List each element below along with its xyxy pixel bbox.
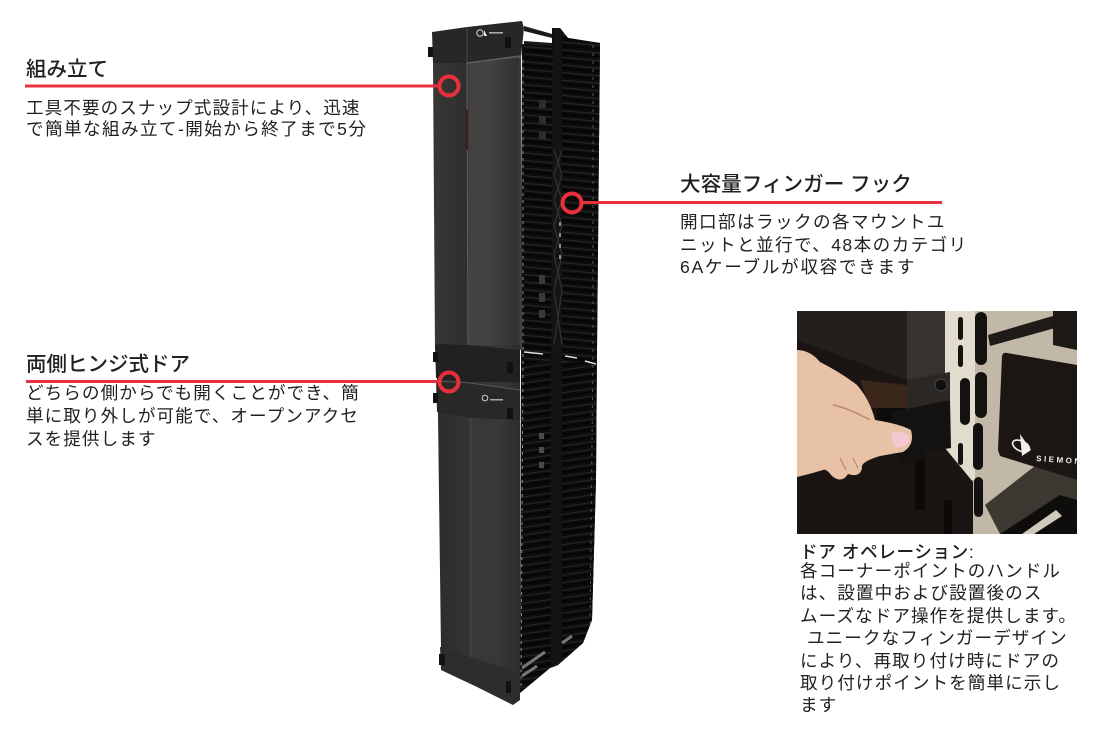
body: finger hook: [680, 212, 968, 277]
body: door operation: 各コーナーポイントのハンドル: [800, 561, 1061, 581]
text block: door operation: [800, 542, 1077, 715]
heading: hinged door: 両側ヒンジ式ドア: [26, 353, 190, 376]
body: hinged door: [26, 383, 360, 449]
bottom cap: [439, 647, 520, 705]
body: door operation: ます: [800, 695, 837, 715]
text block: finger hook: [680, 173, 968, 277]
body: finger hook: 開口部はラックの各マウントユ: [680, 212, 946, 232]
body: door operation: は、設置中および設置後のス: [800, 583, 1042, 603]
body: door operation: ユニークなフィンガーデザイン: [807, 628, 1068, 648]
heading: finger hook: 大容量フィンガー フック: [680, 173, 912, 196]
callout line: finger hook: [562, 194, 942, 212]
body: hinged door: スを提供します: [26, 429, 157, 449]
text block: hinged door: [26, 353, 360, 449]
Siemon card: SIEMON: [1036, 454, 1083, 466]
tower upper door: [428, 21, 524, 350]
tower rear handle: [524, 26, 552, 47]
body: finger hook: 6Aケーブルが収容できます: [680, 257, 916, 277]
heading: assembly: 組み立て: [26, 58, 108, 81]
body: assembly: で簡単な組み立て-開始から終了まで5分: [26, 119, 367, 139]
mid caps with logo: [433, 344, 520, 420]
hand: [797, 350, 912, 480]
body: finger hook: ニットと並行で、48本のカテゴリ: [680, 235, 968, 255]
tower finger rack side: [518, 26, 602, 696]
photo: hand operating door handle: [797, 311, 1083, 534]
callout line: hinged door: [26, 372, 458, 392]
text block: assembly: [26, 58, 367, 139]
body: door operation: ムーズなドア操作を提供します。: [800, 606, 1077, 626]
callout line: assembly: [25, 76, 458, 96]
body: assembly: [26, 98, 367, 139]
heading: door operation: ドア オペレーション:: [800, 542, 974, 562]
body: hinged door: どちらの側からでも開くことができ、簡: [26, 383, 360, 403]
body: assembly: 工具不要のスナップ式設計により、迅速: [26, 98, 361, 118]
body: door operation: により、再取り付け時にドアの: [800, 651, 1060, 671]
body: hinged door: 単に取り外しが可能で、オープンアクセ: [26, 406, 359, 426]
body: door operation: [800, 561, 1077, 715]
upper top cap with logo: [432, 21, 524, 63]
tower lower door: [433, 344, 520, 705]
body: door operation: 取り付けポイントを簡単に示し: [800, 673, 1061, 693]
Siemon card: [998, 353, 1083, 480]
